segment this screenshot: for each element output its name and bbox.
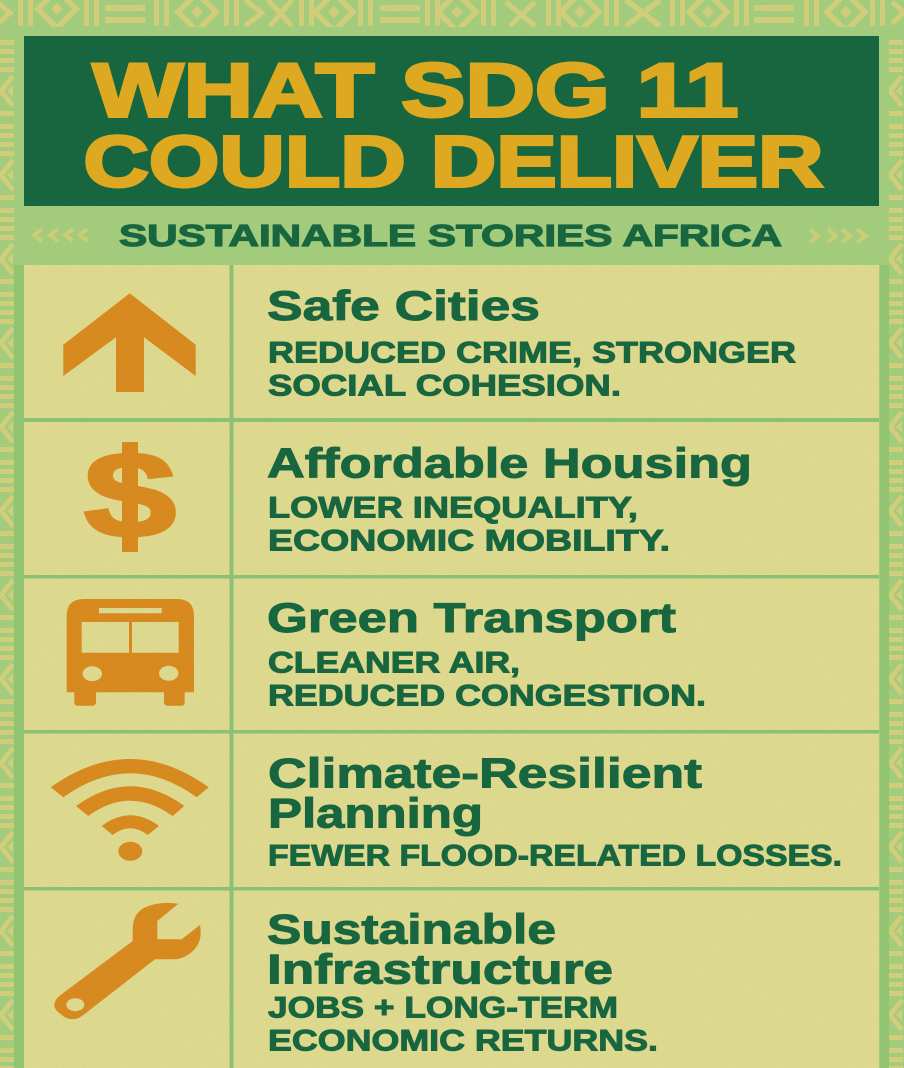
icon: bus <box>67 599 194 706</box>
top pattern band <box>0 0 904 31</box>
row 4: climate-resilient planning: Planning <box>268 790 483 836</box>
icon: wrench <box>54 903 201 1019</box>
row 4: climate-resilient planning <box>268 750 842 872</box>
row 3: green transport: Green Transport <box>267 594 676 641</box>
row 4: climate-resilient planning: Climate-Resilient <box>268 750 702 796</box>
icon: dollar sign: $ <box>84 426 176 563</box>
row 5: sustainable infrastructure: Infrastructure <box>267 946 613 992</box>
left pattern band <box>0 36 14 1068</box>
icon: up arrow <box>63 293 196 392</box>
title banner <box>24 36 879 206</box>
row 2: affordable housing: ECONOMIC MOBILITY. <box>268 524 670 558</box>
panel: benefits table <box>24 265 879 1068</box>
row 3: green transport: REDUCED CONGESTION. <box>268 680 706 712</box>
row 1: safe cities: REDUCED CRIME, STRONGER <box>268 336 796 370</box>
left chevrons <box>34 229 87 241</box>
subtitle: SUSTAINABLE STORIES AFRICA <box>119 218 782 253</box>
row 5: sustainable infrastructure: ECONOMIC RETURNS. <box>268 1024 658 1058</box>
row 2: affordable housing: LOWER INEQUALITY, <box>268 492 638 524</box>
title line 2: COULD DELIVER <box>84 122 824 202</box>
row 1: safe cities: Safe Cities <box>267 282 540 329</box>
row 5: sustainable infrastructure: Sustainable <box>267 906 556 952</box>
row 3: green transport <box>267 594 706 712</box>
row 2: affordable housing: Affordable Housing <box>267 440 752 486</box>
row 2: affordable housing <box>267 440 752 558</box>
row 3: green transport: CLEANER AIR, <box>268 646 520 680</box>
icon: wifi signal <box>51 759 209 861</box>
right pattern band <box>889 36 904 1068</box>
row 5: sustainable infrastructure <box>267 906 658 1058</box>
title line 1: WHAT SDG 11 <box>92 48 738 134</box>
row 1: safe cities: SOCIAL COHESION. <box>268 370 621 402</box>
right chevrons <box>810 229 866 242</box>
row 4: climate-resilient planning: FEWER FLOOD-RELATED LOSSES. <box>268 840 842 872</box>
row 5: sustainable infrastructure: JOBS + LONG-TERM <box>268 992 618 1024</box>
row 1: safe cities <box>267 282 796 402</box>
